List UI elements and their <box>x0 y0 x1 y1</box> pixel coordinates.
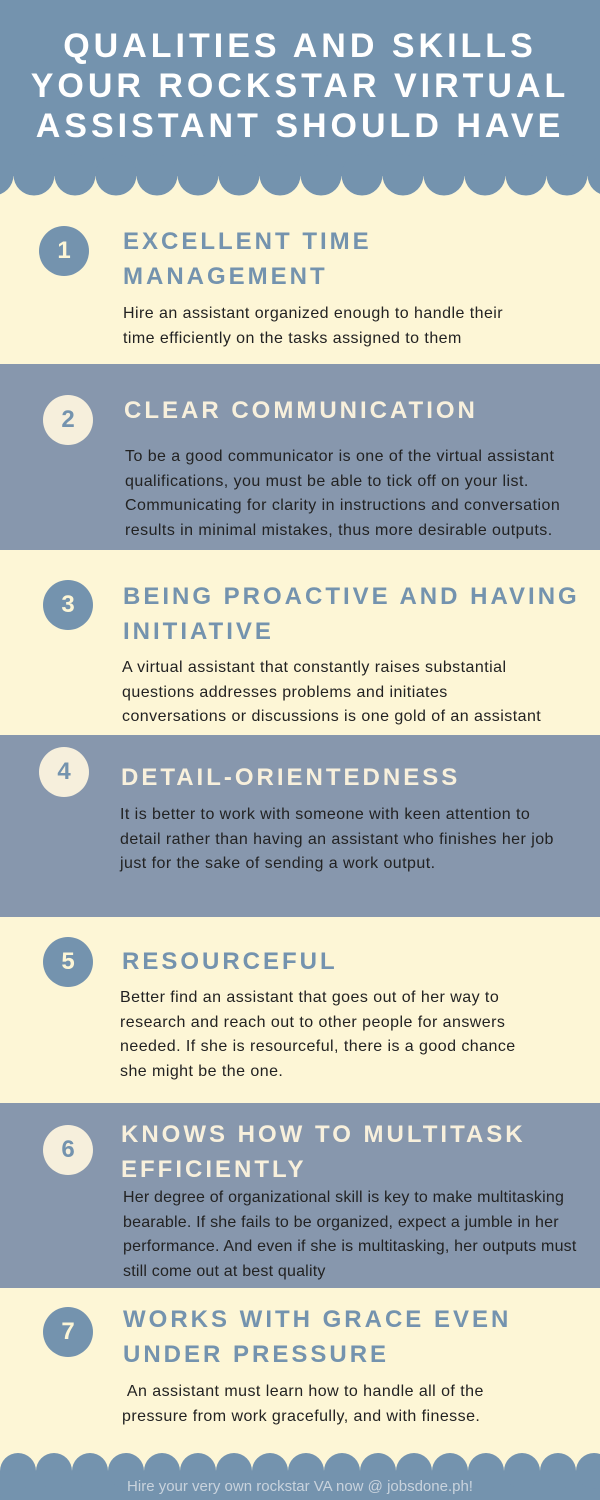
text 5: Better find an assistant that goes out of her way to <box>120 989 499 1006</box>
heading 6 <box>121 1121 526 1183</box>
heading 3: BEING PROACTIVE AND HAVING <box>123 583 580 610</box>
text 2: Communicating for clarity in instructions and conversation <box>125 497 560 514</box>
item 4 <box>39 747 554 872</box>
footer text: Hire your very own rockstar VA now @ jobsdone.ph! <box>127 1478 473 1495</box>
icon: number 5: 5 <box>61 948 75 975</box>
icon: number 1: 1 <box>57 237 71 264</box>
heading 1 <box>123 228 372 290</box>
text 5: she might be the one. <box>120 1063 283 1080</box>
icon: number 7: 7 <box>61 1318 75 1345</box>
text 6: performance. And even if she is multitasking, her outputs must <box>123 1238 577 1255</box>
text 3: A virtual assistant that constantly raises substantial <box>122 659 506 676</box>
text 7: pressure from work gracefully, and with finesse. <box>122 1408 480 1425</box>
text 6: still come out at best quality <box>123 1263 326 1280</box>
text 1 <box>123 305 503 347</box>
item 6 <box>43 1121 577 1280</box>
icon: number 4 <box>39 747 89 797</box>
heading 5: RESOURCEFUL <box>122 948 338 975</box>
icon: number 5 <box>43 937 93 987</box>
text 4: just for the sake of sending a work output. <box>120 855 436 872</box>
text 6: Her degree of organizational skill is key to make multitasking <box>123 1189 564 1206</box>
icon: number 2: 2 <box>61 406 75 433</box>
text 4 <box>120 806 554 872</box>
heading 7 <box>123 1306 511 1368</box>
item 5 <box>43 937 516 1080</box>
icon: number 4: 4 <box>57 758 71 785</box>
heading 6: EFFICIENTLY <box>121 1156 306 1183</box>
heading 7: WORKS WITH GRACE EVEN <box>123 1306 511 1333</box>
icon: number 6 <box>43 1125 93 1175</box>
text 1: time efficiently on the tasks assigned to them <box>123 330 462 347</box>
text 1: Hire an assistant organized enough to handle their <box>123 305 503 322</box>
header background with scallops <box>0 0 600 196</box>
text 3: conversations or discussions is one gold of an assistant <box>122 708 541 725</box>
icon: number 2 <box>43 395 93 445</box>
panel: gray 2 <box>0 364 600 550</box>
panel: gray 4 <box>0 735 600 917</box>
icon: number 3: 3 <box>61 591 75 618</box>
text 6 <box>123 1189 577 1280</box>
heading 7: UNDER PRESSURE <box>123 1341 389 1368</box>
text 2: qualifications, you must be able to tick off on your list. <box>125 473 529 490</box>
text 5: needed. If she is resourceful, there is a good chance <box>120 1038 516 1055</box>
item 2 <box>43 395 560 539</box>
title: YOUR ROCKSTAR VIRTUAL <box>31 67 569 105</box>
heading 1: EXCELLENT TIME <box>123 228 372 255</box>
text 2: To be a good communicator is one of the virtual assistant <box>125 448 554 465</box>
text 5 <box>120 989 516 1080</box>
text 5: research and reach out to other people for answers <box>120 1014 505 1031</box>
item 7 <box>43 1306 511 1425</box>
title: ASSISTANT SHOULD HAVE <box>36 107 564 145</box>
heading 1: MANAGEMENT <box>123 263 328 290</box>
title <box>31 27 569 145</box>
text 4: It is better to work with someone with keen attention to <box>120 806 530 823</box>
heading 4: DETAIL-ORIENTEDNESS <box>121 764 460 791</box>
text 2 <box>125 448 560 539</box>
footer background with scallops <box>0 1453 600 1500</box>
text 3 <box>122 659 541 725</box>
title: QUALITIES AND SKILLS <box>63 27 537 65</box>
icon: number 1 <box>39 226 89 276</box>
text 6: bearable. If she fails to be organized, expect a jumble in her <box>123 1214 559 1231</box>
panel: gray 6 <box>0 1103 600 1288</box>
icon: number 7 <box>43 1307 93 1357</box>
item 1 <box>39 226 503 347</box>
heading 3: INITIATIVE <box>123 618 274 645</box>
icon: number 3 <box>43 580 93 630</box>
text 7: An assistant must learn how to handle all of the <box>127 1383 484 1400</box>
icon: number 6: 6 <box>61 1136 75 1163</box>
text 7 <box>122 1383 484 1425</box>
text 2: results in minimal mistakes, thus more desirable outputs. <box>125 522 553 539</box>
text 4: detail rather than having an assistant who finishes her job <box>120 831 554 848</box>
heading 6: KNOWS HOW TO MULTITASK <box>121 1121 526 1148</box>
heading 3 <box>123 583 580 645</box>
item 3 <box>43 580 580 725</box>
heading 2: CLEAR COMMUNICATION <box>124 397 478 424</box>
text 3: questions addresses problems and initiates <box>122 684 448 701</box>
